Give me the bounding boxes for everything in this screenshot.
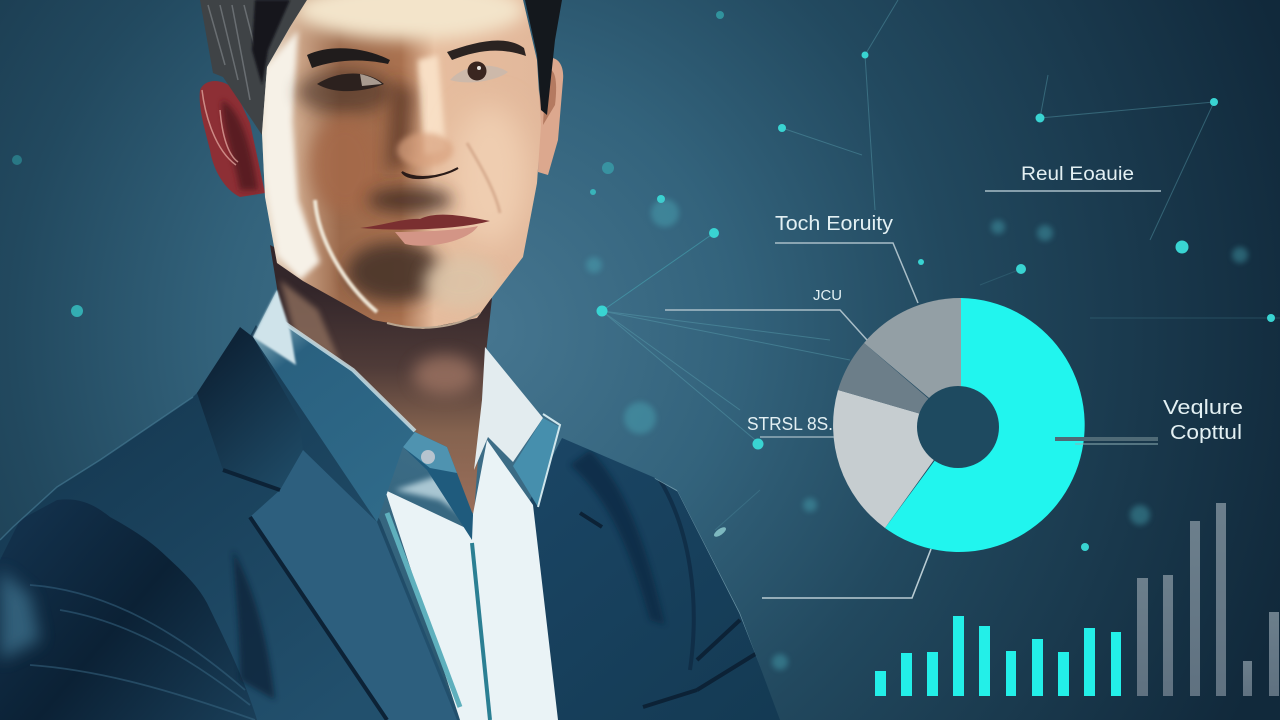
nose tip (397, 133, 453, 167)
donut hole (917, 386, 999, 468)
shirt (385, 440, 558, 720)
eye socket shadow (297, 70, 393, 114)
left hair (200, 0, 310, 135)
shirt shadow under collar (395, 475, 470, 520)
right nasolabial (467, 143, 500, 213)
face (262, 0, 541, 329)
label: JCU (665, 287, 867, 340)
right brow (447, 40, 526, 60)
collar button (421, 450, 435, 464)
forehead light (295, 0, 525, 40)
body crease shadow (233, 550, 275, 700)
upper lip shadow (368, 187, 452, 213)
left ear (200, 81, 265, 197)
upper lapel (197, 327, 303, 490)
left ear rim (202, 90, 238, 165)
label: Tech Equity: Toch Eoruity (775, 213, 893, 235)
nose bridge highlight (418, 55, 446, 155)
under-lip and chin shadow (347, 242, 443, 302)
label: Venture Capital: Copttul (1170, 422, 1242, 444)
jaw edge highlight (387, 313, 480, 328)
cyan bars (875, 616, 1121, 696)
nostril (402, 168, 458, 178)
left sleeve (0, 499, 257, 720)
leader line bottom (762, 549, 931, 598)
right ear inner (543, 69, 556, 125)
left eye (317, 73, 384, 91)
collar button panel (403, 432, 457, 473)
lower lapel (250, 450, 457, 720)
suit left body (0, 325, 460, 720)
shirt left teal stripe (387, 513, 460, 707)
neck (270, 245, 492, 515)
collar inner blue (403, 432, 473, 540)
slice: dark grey (838, 343, 959, 425)
bar chart (875, 503, 1279, 696)
right cheek light (452, 105, 528, 245)
label: JCU: JCU (813, 287, 842, 304)
right eye catchlight (477, 66, 481, 70)
left brow (307, 48, 390, 68)
left cheek light strip (263, 30, 320, 280)
sleeve folds (30, 585, 255, 720)
right collar inner (513, 418, 560, 507)
label: Venture Capital: Veqlure (1163, 397, 1243, 419)
shirt placket line (472, 543, 490, 720)
left ear inner shadow (222, 100, 258, 190)
collar edge highlight (283, 322, 415, 431)
slice: cyan venture capital (885, 298, 1085, 552)
lapel shadow edge (223, 470, 387, 720)
chin light (424, 256, 500, 308)
man portrait (0, 0, 782, 720)
label: Venture Capital (1055, 397, 1243, 444)
right hair (525, 0, 562, 115)
hair strands (208, 5, 258, 100)
label: Stocks: STRSL 8S. (747, 414, 833, 434)
neck left light (280, 280, 340, 362)
collar top light (253, 290, 296, 365)
neck warm highlight (413, 355, 477, 395)
right ear (538, 58, 563, 175)
right eye (450, 66, 508, 82)
right collar edge (538, 414, 560, 507)
grey bars (1137, 503, 1279, 696)
donut chart (833, 298, 1085, 552)
slice: mid grey (864, 298, 961, 425)
hair dark core (252, 0, 290, 85)
nose side shadow (386, 80, 414, 175)
sleeve left highlight (0, 570, 40, 660)
left eye white (360, 74, 382, 86)
under-eye warm cheek (302, 113, 354, 208)
left collar (253, 290, 415, 522)
upper lip (360, 215, 490, 230)
nasolabial streak (315, 200, 377, 312)
right eye iris (468, 62, 486, 80)
shoulder edge (0, 397, 193, 540)
lower lip (395, 226, 478, 246)
right collar white (474, 347, 543, 470)
label: Tech Equity (775, 213, 918, 303)
slice: light grey (833, 390, 959, 528)
suit right body (530, 438, 780, 720)
right suit shading (570, 450, 760, 709)
label: Real Estate: Reul Eoauie (1021, 164, 1134, 185)
